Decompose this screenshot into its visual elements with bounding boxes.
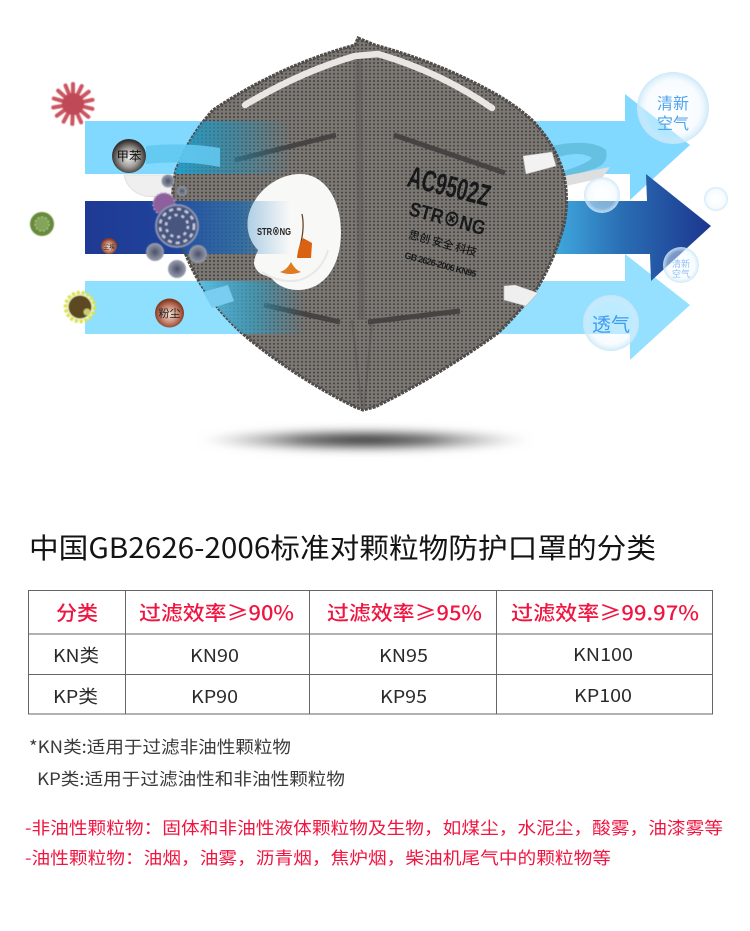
bubble: breathable (583, 295, 639, 351)
particle: purple (153, 193, 175, 215)
valve cover (247, 174, 341, 290)
bubble: fresh air large: 清新 (657, 90, 689, 114)
table row KP: KP类 (53, 683, 98, 709)
bubble: breathable: 透气 (592, 310, 630, 337)
valve orange vent lower (280, 262, 301, 274)
valve blue tint (248, 201, 286, 254)
table header: 过滤效率≥99.97% (511, 597, 699, 626)
bubble: fresh air small (663, 247, 699, 283)
table row KP: KP95 (380, 683, 427, 709)
table header: 分类 (56, 597, 98, 626)
valve orange vent right (297, 238, 312, 258)
icon: green virus (30, 212, 54, 236)
mask fabric (173, 38, 566, 410)
label ball: dust (155, 298, 184, 328)
valve logo text: STR⊗NG (257, 226, 291, 238)
table row KP: KP100 (574, 682, 632, 708)
particles cluster (146, 174, 207, 278)
mask print: STR⊗NG (407, 199, 488, 240)
table header: 过滤效率≥95% (327, 597, 482, 626)
table row KP: KP90 (191, 683, 238, 709)
mask print (403, 161, 494, 279)
flow bars tinting the mask (174, 121, 300, 334)
table grid (28, 590, 713, 714)
left strap pieces tinted blue (146, 144, 234, 308)
mask print: AC9502Z (404, 161, 494, 213)
bubble: fresh air large (637, 72, 709, 144)
note: particle definitions: -非油性颗粒物：固体和非油性液体颗粒物及生物，如煤尘，水泥尘，酸雾，油漆雾等 (25, 814, 723, 839)
middle right arrow: dark blue (520, 174, 711, 281)
title: 中国GB2626-2006标准对颗粒物防护口罩的分类 (29, 527, 656, 567)
fold lines (235, 52, 505, 408)
mask print: GB 2626-2006 KN95 (403, 250, 478, 279)
table row KN: KN100 (573, 641, 633, 667)
top right arrow: light blue (480, 94, 690, 200)
mask print: 思创 安全 科技 (407, 226, 479, 260)
mask body (173, 38, 566, 410)
bubble: fresh air large: 空气 (657, 110, 689, 134)
bottom right arrow: light blue (420, 254, 690, 360)
table row KN: KN95 (379, 642, 428, 668)
table row KN (53, 641, 633, 668)
valve dark slit (300, 214, 303, 246)
particle: small grey group (146, 174, 207, 278)
particle: large blue virus (156, 205, 198, 247)
tint: top bar (175, 121, 284, 174)
table header (56, 597, 699, 626)
valve inner ridge (262, 250, 328, 281)
right strap tabs (523, 152, 556, 174)
note: particle definitions (25, 814, 723, 869)
nose strip (245, 54, 492, 108)
bar: bottom light blue (85, 281, 255, 334)
label ball: toluene: 甲苯 (116, 146, 142, 164)
label ball: toluene (112, 139, 146, 173)
table row KN: KN类 (53, 642, 99, 668)
note: particle definitions: -油性颗粒物：油烟，油雾，沥青烟，焦炉烟，柴油机尾气中的颗粒物等 (25, 844, 611, 869)
label ball: small red: 尘埃 (103, 242, 115, 251)
bubble: plain (584, 177, 620, 213)
icon: yellow virus (66, 292, 94, 322)
left bars under the mask (85, 121, 255, 334)
bar: middle dark blue (85, 201, 195, 254)
tint: bottom bar (198, 281, 300, 334)
mask straps behind the mask (124, 143, 610, 197)
ground shadow (197, 427, 533, 453)
classification table (28, 590, 713, 714)
tint: middle bar (174, 201, 258, 254)
table row KN: KN90 (190, 642, 239, 668)
note: KN and KP applicability: KP类:适用于过滤油性和非油性颗粒物 (37, 765, 345, 790)
note: KN and KP applicability (29, 733, 345, 790)
table row KP (53, 682, 632, 709)
label ball: small red (101, 238, 117, 254)
bar: top light blue (85, 121, 215, 174)
note: KN and KP applicability: *KN类:适用于过滤非油性颗粒物 (29, 733, 291, 758)
label ball: dust: 粉尘 (158, 305, 180, 321)
table header: 过滤效率≥90% (139, 597, 294, 626)
bubble: small plain (704, 187, 728, 211)
icon: red virus (53, 84, 93, 124)
bubble: fresh air small: 空气 (672, 267, 690, 280)
bubble: fresh air small: 清新 (672, 257, 690, 270)
exhalation valve (245, 174, 341, 290)
